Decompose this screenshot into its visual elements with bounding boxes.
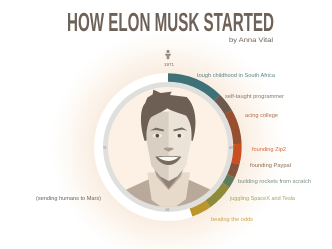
title: HOW ELON MUSK STARTED <box>67 8 274 37</box>
tick bottom: as <box>166 208 170 212</box>
portrait <box>125 90 211 212</box>
eyebrows <box>150 128 164 131</box>
arc: juggling <box>208 185 226 204</box>
neck <box>154 169 184 190</box>
shoulders and shirt <box>126 180 210 207</box>
arc: acing college <box>228 112 237 144</box>
eyes <box>153 134 162 138</box>
label: founding Paypal: founding Paypal <box>250 163 291 169</box>
mouth <box>155 156 181 165</box>
nose <box>163 148 174 152</box>
label: sending humans: (sending humans to Mars) <box>36 196 101 202</box>
arc: founding Paypal <box>231 164 235 176</box>
tick left: is <box>104 146 106 150</box>
label: self-taught: self-taught programmer <box>225 94 284 100</box>
milestone labels <box>36 73 311 223</box>
icon: baby <box>165 50 171 60</box>
label: acing college: acing college <box>245 113 278 119</box>
hair <box>141 90 195 141</box>
byline: by Anna Vital <box>229 37 274 44</box>
tick right: as <box>229 146 233 150</box>
label: building rockets: building rockets from scratch <box>238 179 311 185</box>
arc: beating the odds <box>191 204 208 212</box>
label: beating the odds: beating the odds <box>211 217 253 223</box>
arc: building rockets <box>226 176 231 185</box>
grey inner ring <box>106 84 230 210</box>
arc: tough childhood <box>168 78 217 98</box>
birth year: 1971 <box>164 62 175 67</box>
arc: self-taught <box>217 98 228 112</box>
label: founding Zip2: founding Zip2 <box>252 147 286 153</box>
label: juggling: juggling SpaceX and Tesla <box>229 196 296 202</box>
timeline arc <box>168 78 237 212</box>
ring tick labels <box>104 146 233 212</box>
white outer ring <box>94 73 242 221</box>
face <box>147 112 191 181</box>
label: tough childhood: tough childhood in South Africa <box>197 73 276 79</box>
arc: founding Zip2 <box>235 144 237 164</box>
